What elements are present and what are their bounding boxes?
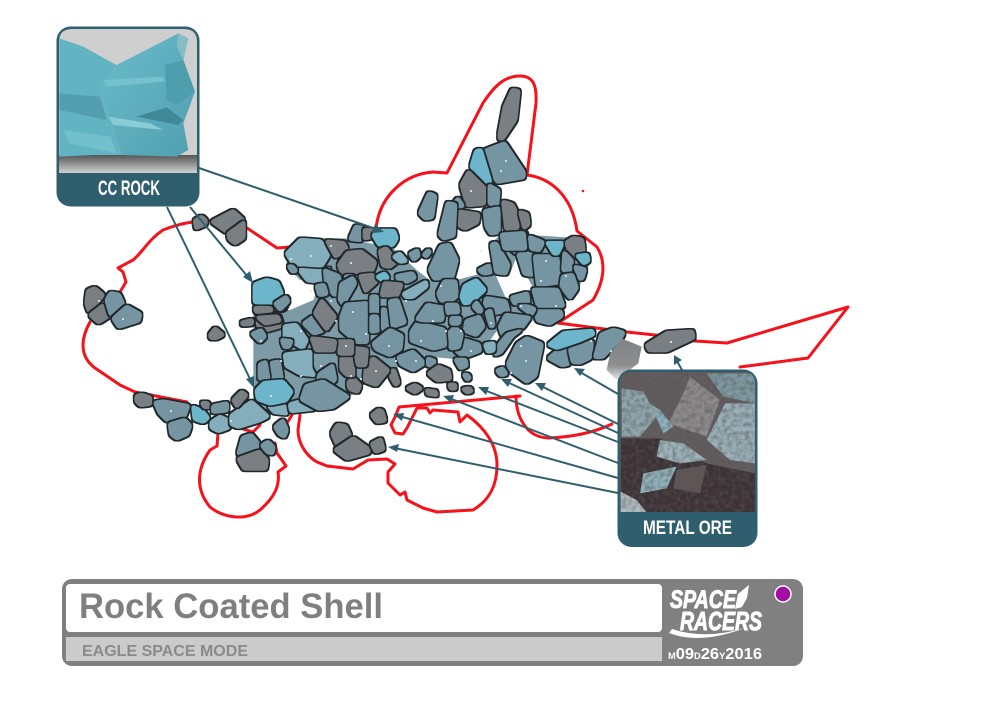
rock cluster: tail fin xyxy=(418,88,530,250)
rock cluster: left wing tip and top xyxy=(85,209,290,343)
panel: CC rock xyxy=(56,26,200,206)
sparkle specks on rocks xyxy=(98,160,672,422)
gap filler behind right rocks xyxy=(490,233,590,290)
photo: turquoise rock sample xyxy=(59,29,197,173)
subtitle strip xyxy=(66,637,662,661)
title block xyxy=(62,579,803,666)
label: METAL ORE: METAL ORE xyxy=(643,518,732,539)
photo: metal ore sample xyxy=(620,372,755,512)
title: Rock Coated Shell xyxy=(79,587,383,626)
subtitle: EAGLE SPACE MODE xyxy=(82,643,248,660)
gap filler behind central rocks xyxy=(253,238,565,413)
rock cluster: right wing xyxy=(547,328,695,380)
panel: metal ore xyxy=(618,370,758,547)
rock cluster: lower left wing xyxy=(135,380,387,470)
arrows: metal ore callouts xyxy=(388,355,682,493)
logo: Space Racers: SPACE xyxy=(670,586,737,614)
date stamp: M09D26Y2016 xyxy=(668,646,762,663)
status dot xyxy=(775,586,791,602)
arrows: CC rock callouts xyxy=(167,168,384,388)
red speck xyxy=(582,190,584,192)
rock cluster: central hull xyxy=(253,225,590,413)
label: CC ROCK: CC ROCK xyxy=(98,177,160,200)
logo: Space Racers: RACERS xyxy=(680,606,762,636)
title strip xyxy=(66,584,662,632)
logo: Space Racers xyxy=(669,585,762,638)
red outline: ship silhouette xyxy=(83,76,848,517)
